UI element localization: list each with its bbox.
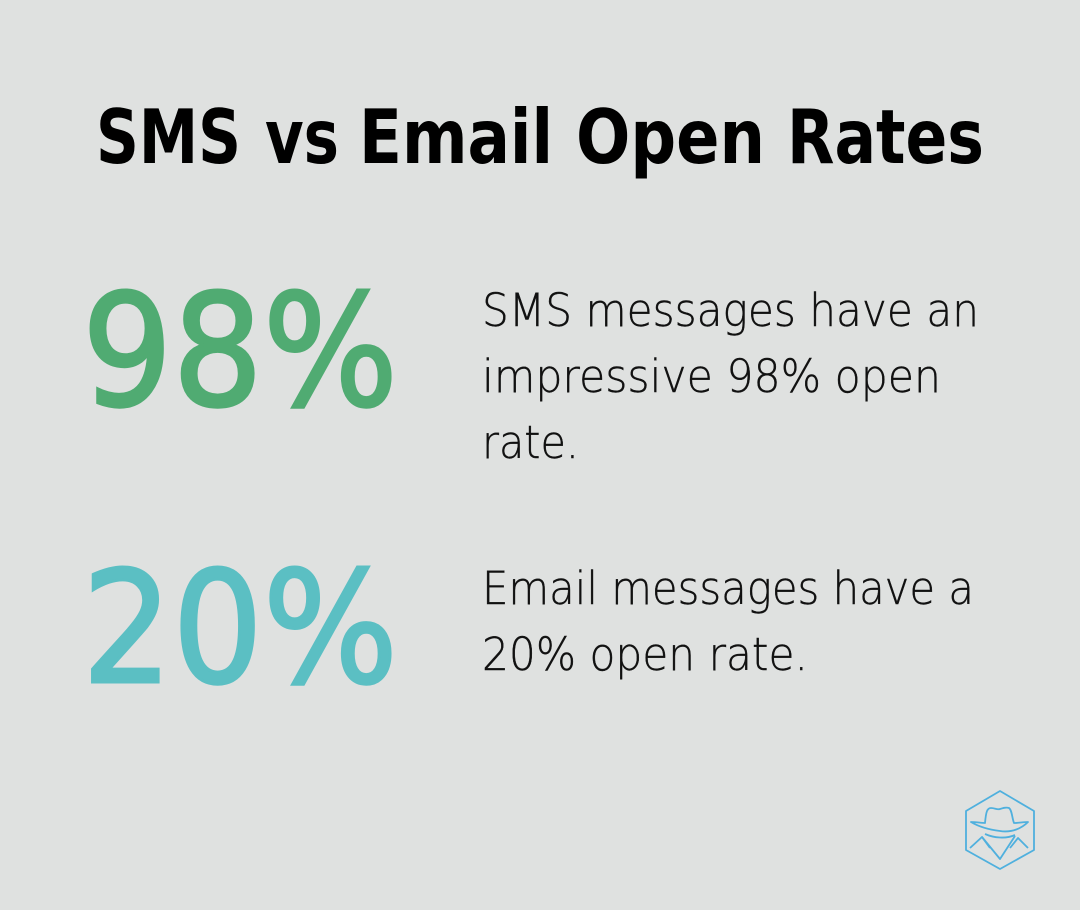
text block: Email description: 20% open rate. xyxy=(482,628,808,681)
text block: SMS description xyxy=(482,284,979,469)
text block: SMS description: impressive 98% open xyxy=(482,350,941,403)
title: vs xyxy=(265,93,339,181)
title: Rates xyxy=(787,93,984,181)
title: SMS xyxy=(96,93,241,181)
stat: 20 percent: 20% xyxy=(82,538,398,719)
text block: Email description: Email messages have a xyxy=(482,562,974,615)
text block: Email description xyxy=(482,562,974,681)
icon: logo hexagon with hat xyxy=(966,791,1034,869)
text block: SMS description: rate. xyxy=(482,416,579,469)
text block: SMS description: SMS messages have an xyxy=(482,284,979,337)
title: Open xyxy=(576,93,765,181)
title: Email xyxy=(359,93,553,181)
stat: 98 percent: 98% xyxy=(82,261,398,442)
